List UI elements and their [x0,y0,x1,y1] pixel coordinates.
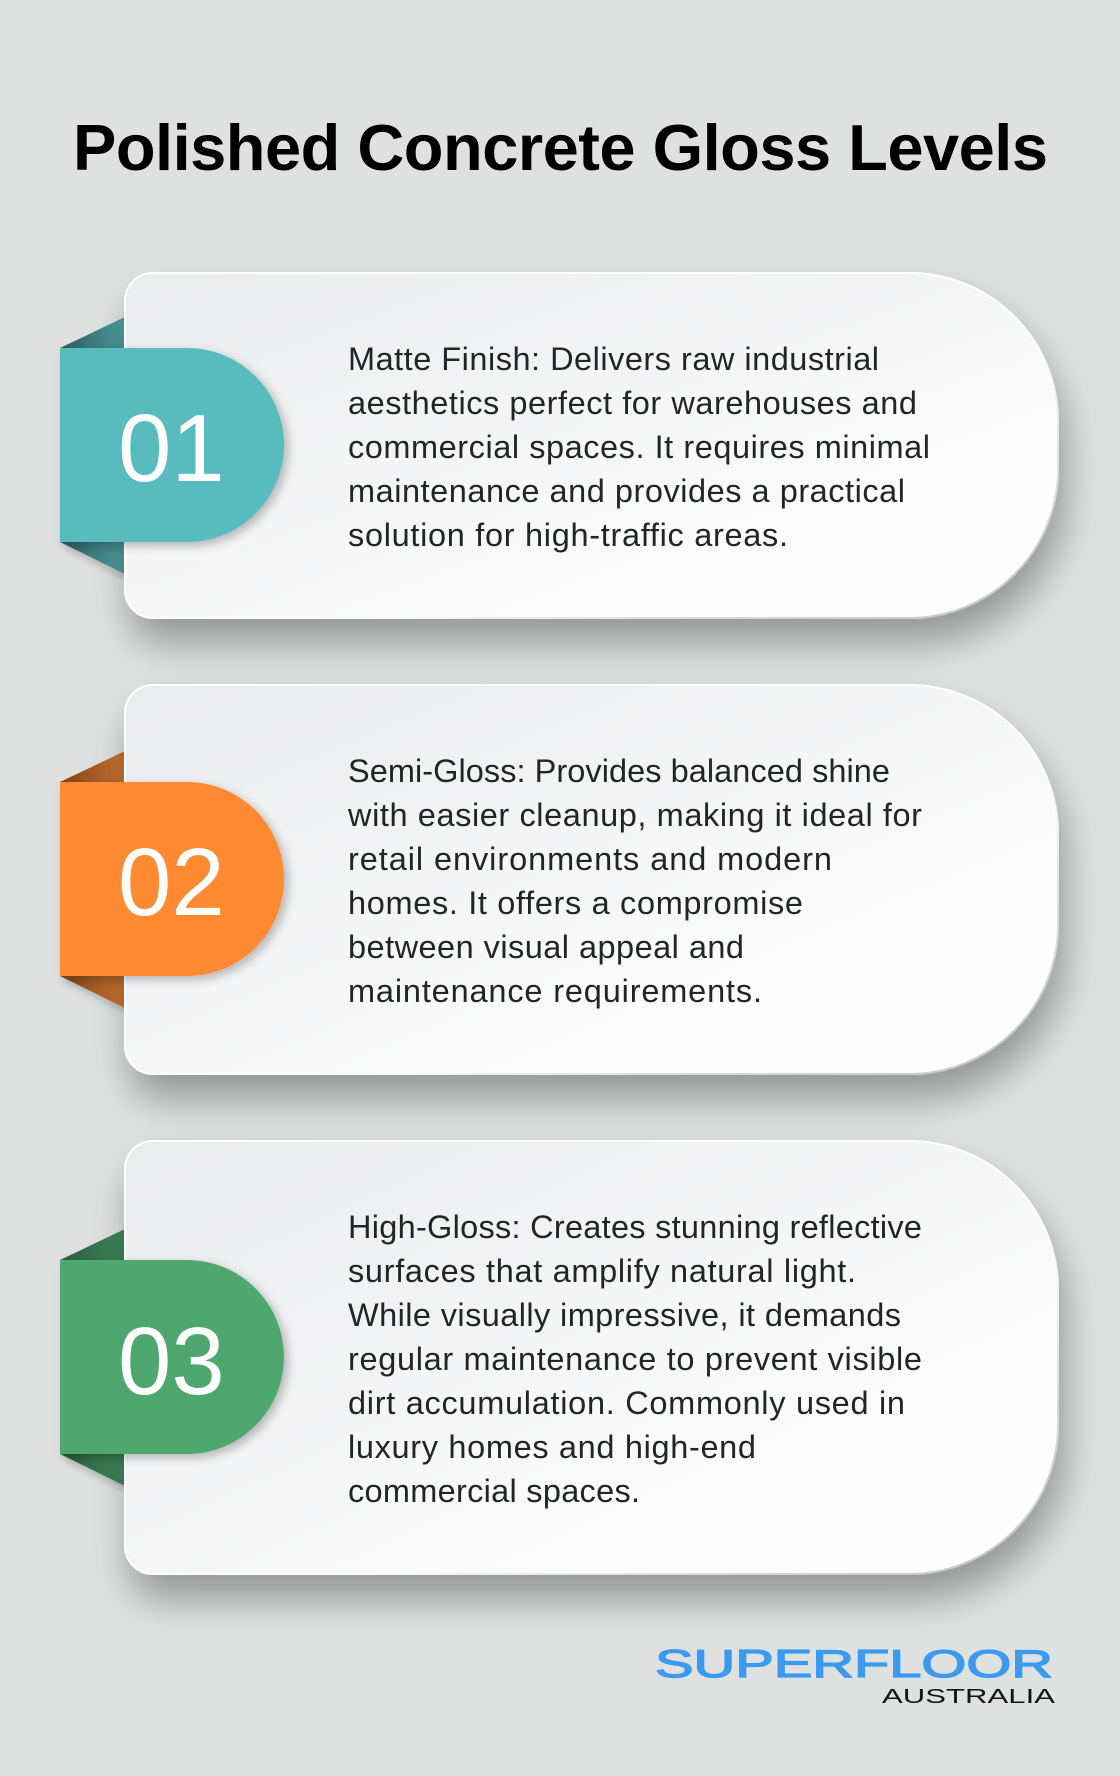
badge: 02 [60,782,284,976]
text: high-gloss: surfaces that amplify natural light. [348,1253,856,1289]
text: matte finish: commercial spaces. It requires minimal [348,429,930,465]
ribbon folds: orange [60,751,125,1008]
logo: superfloor australia: SUPERFLOOR [655,1643,1053,1686]
text: semi-gloss: with easier cleanup, making it ideal for [347,797,922,833]
text: semi-gloss: between visual appeal and [348,929,744,965]
ribbon folds: green [60,1229,125,1486]
badge: 03 [60,1260,284,1454]
logo: superfloor australia: AUSTRALIA [882,1686,1056,1708]
text: high-gloss: commercial spaces. [348,1473,640,1509]
title: Polished Concrete Gloss Levels [73,111,1048,184]
text: semi-gloss: homes. It offers a compromise [348,885,803,921]
panel: 03 high-gloss [60,1141,1058,1574]
panel: 01 matte finish [60,273,1058,618]
text: high-gloss: dirt accumulation. Commonly used in [348,1385,905,1421]
text: matte finish [348,341,930,553]
card background [125,1141,1058,1574]
ribbon folds: teal [60,317,125,574]
text: matte finish: Matte Finish: Delivers raw industrial [348,341,879,377]
text: high-gloss: High-Gloss: Creates stunning reflective [348,1209,922,1245]
text: high-gloss: luxury homes and high-end [348,1429,756,1465]
badge: 01 [60,348,284,542]
text: matte finish: aesthetics perfect for warehouses and [348,385,917,421]
text: semi-gloss: maintenance requirements. [348,973,762,1009]
badge: 01: 01 [118,395,225,502]
text: semi-gloss: Semi-Gloss: Provides balanced shine [348,753,890,789]
text: high-gloss: regular maintenance to prevent visible [348,1341,922,1377]
text: high-gloss [348,1209,922,1509]
text: semi-gloss: retail environments and modern [348,841,832,877]
card background [125,273,1058,618]
text: high-gloss: While visually impressive, it demands [348,1297,901,1333]
logo: superfloor australia [655,1643,1056,1708]
badge: 02: 02 [118,829,225,936]
panel: 02 semi-gloss [60,685,1058,1074]
text: semi-gloss [347,753,922,1009]
text: matte finish: solution for high-traffic areas. [348,517,788,553]
card background [125,685,1058,1074]
text: matte finish: maintenance and provides a practical [348,473,905,509]
badge: 03: 03 [118,1308,225,1415]
